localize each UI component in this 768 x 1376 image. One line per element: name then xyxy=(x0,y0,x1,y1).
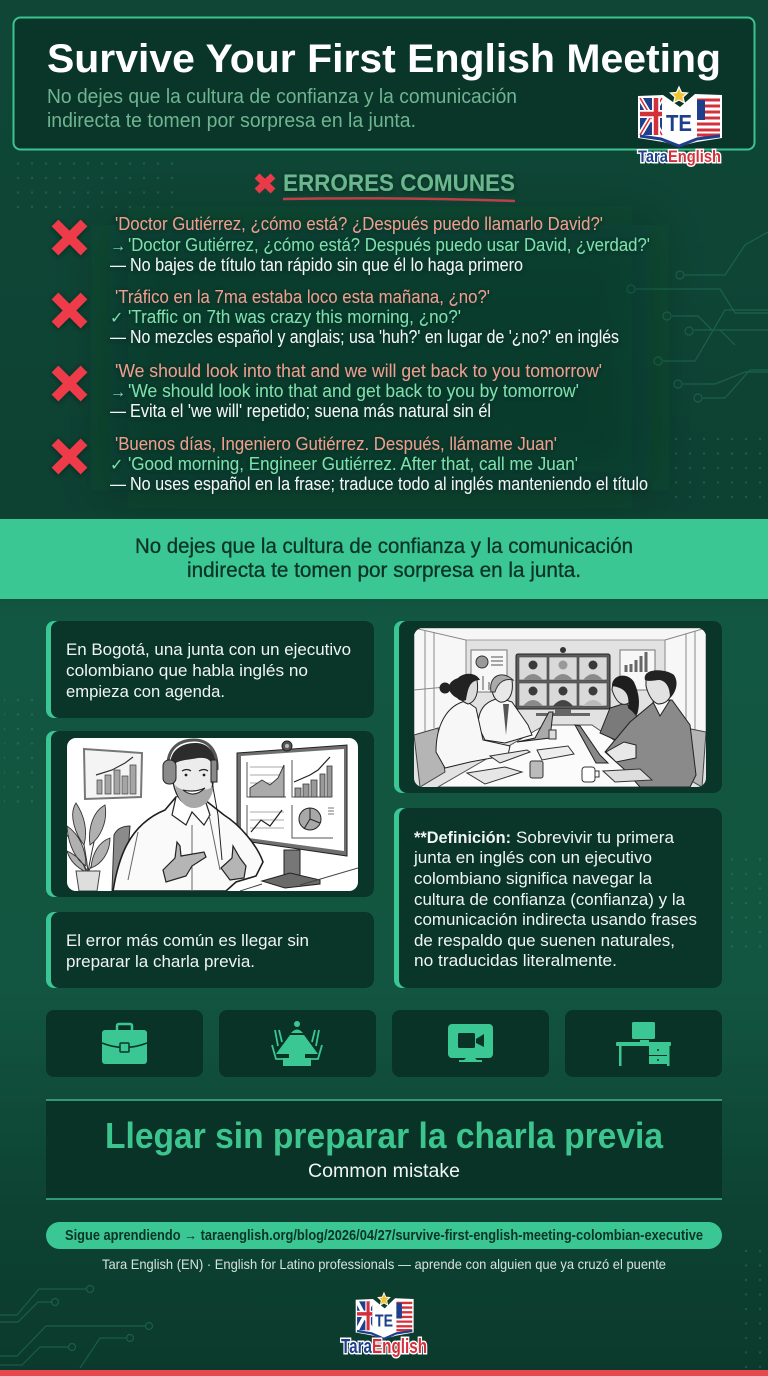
mistake 3: — xyxy=(110,400,126,421)
subtitle xyxy=(47,86,517,132)
link pill xyxy=(46,1222,722,1249)
logo: footer: TaraEnglish xyxy=(341,1336,427,1358)
card: definition: **Definición: xyxy=(414,828,511,847)
logo: footer xyxy=(341,1293,427,1358)
card: definition: cultura de confianza (confianza) y la xyxy=(414,890,686,909)
video screen xyxy=(560,647,566,653)
mistake 2: 'Traffic on 7th was crazy this morning, ¿no?' xyxy=(128,306,461,327)
logo: header: TaraEnglish xyxy=(638,147,721,166)
card: Bogotá intro xyxy=(46,621,374,718)
card: Bogotá intro: empieza con agenda. xyxy=(66,682,225,701)
laptop left xyxy=(517,712,553,742)
mistake 1 xyxy=(55,213,650,275)
icon card: desk xyxy=(565,1010,722,1077)
monitor xyxy=(284,850,300,880)
card: common error xyxy=(46,912,374,988)
mistake 3: 'We should look into that and we will get back to you tomorrow' xyxy=(115,360,602,381)
key message band: Llegar sin preparar la charla previa xyxy=(105,1115,664,1156)
card: definition: Sobrevivir tu primera xyxy=(516,828,675,847)
mistake 4: 'Buenos días, Ingeniero Gutiérrez. Después, llámame Juan' xyxy=(115,433,557,454)
mistake 2: ✓ xyxy=(110,310,123,327)
mistake 3: 'We should look into that and get back to you by tomorrow' xyxy=(128,380,579,401)
title: Survive Your First English Meeting xyxy=(47,37,721,81)
header panel xyxy=(14,18,754,150)
left man xyxy=(478,698,532,743)
green banner xyxy=(0,519,768,599)
card: common error: preparar la charla previa. xyxy=(66,952,255,971)
card: definition: no traducidas literalmente. xyxy=(414,951,617,970)
icon: red cross xyxy=(257,176,273,191)
person shirt xyxy=(113,797,263,891)
card: Bogotá intro: En Bogotá, una junta con un ejecutivo xyxy=(66,640,351,659)
mistake 4 xyxy=(55,433,648,494)
logo: header xyxy=(638,87,722,166)
mistake 4: No uses español en la frase; traduce todo al inglés manteniendo el título xyxy=(130,473,648,494)
green banner: indirecta te tomen por sorpresa en la junta. xyxy=(187,559,581,582)
headphones xyxy=(168,740,217,770)
chair xyxy=(112,826,130,891)
subtitle: indirecta te tomen por sorpresa en la junta. xyxy=(47,110,416,132)
hands xyxy=(163,842,206,882)
mistake 1: — xyxy=(110,254,126,275)
mistake 2 xyxy=(55,286,619,347)
logo: footer: TE xyxy=(375,1311,393,1331)
mistake 3: → xyxy=(110,384,126,401)
mistake 3: Evita el 'we will' repetido; suena más natural sin él xyxy=(130,400,491,421)
plant xyxy=(67,834,110,870)
wall charts xyxy=(471,650,507,692)
icon card: video monitor xyxy=(392,1010,549,1077)
mistake 1: 'Doctor Gutiérrez, ¿cómo está? ¿Después puedo llamarlo David?' xyxy=(115,213,603,234)
card: Bogotá intro: colombiano que habla inglés no xyxy=(66,661,308,680)
link pill: Sigue aprendiendo → taraenglish.org/blog/2026/04/27/survive-first-english-meeting-colombian-executive xyxy=(65,1228,703,1244)
card: illustration of executive on video call xyxy=(46,731,374,897)
bottom red bar xyxy=(0,1370,768,1376)
mistakes list xyxy=(55,213,650,494)
mistake 1: 'Doctor Gutiérrez, ¿cómo está? Después puedo usar David, ¿verdad?' xyxy=(128,234,650,255)
card: definition: colombiano significa navegar la xyxy=(414,869,653,888)
mistake 4: ✓ xyxy=(110,457,123,474)
green banner: No dejes que la cultura de confianza y la comunicación xyxy=(135,535,633,558)
laptop right xyxy=(575,725,608,763)
windows xyxy=(414,628,466,735)
subtitle: No dejes que la cultura de confianza y la comunicación xyxy=(47,86,517,108)
left woman xyxy=(436,701,510,768)
mistake 2: No mezcles español y anglais; usa 'huh?' en lugar de '¿no?' en inglés xyxy=(130,326,619,347)
chairs xyxy=(414,728,445,787)
mistake 1: No bajes de título tan rápido sin que él lo haga primero xyxy=(130,254,523,275)
right man xyxy=(605,700,696,787)
wall frame xyxy=(84,749,142,799)
table papers and cups xyxy=(467,767,522,784)
mistake 2: 'Tráfico en la 7ma estaba loco esta mañana, ¿no?' xyxy=(115,286,490,307)
card: definition: comunicación indirecta usando frases xyxy=(414,910,697,929)
key message band xyxy=(46,1099,722,1199)
card: illustration of meeting room xyxy=(394,621,722,793)
monitor charts xyxy=(247,760,333,838)
mistake 4: 'Good morning, Engineer Gutiérrez. After that, call me Juan' xyxy=(128,453,578,474)
card: definition xyxy=(394,808,722,988)
mistake 2: — xyxy=(110,326,126,347)
logo: header: TE xyxy=(666,110,692,136)
card: definition: junta en inglés con un ejecutivo xyxy=(413,848,652,867)
person head xyxy=(172,758,214,804)
table xyxy=(437,724,640,787)
card: definition: de respaldo que suenen naturales, xyxy=(414,931,675,950)
key message band: Common mistake xyxy=(308,1160,460,1182)
footer text: Tara English (EN) · English for Latino professionals — aprende con alguien que ya cruzó el puente xyxy=(102,1256,666,1272)
mistake 1: → xyxy=(110,238,126,255)
icon card: briefcase xyxy=(46,1010,203,1077)
right woman xyxy=(599,704,637,740)
mistake 4: — xyxy=(110,473,126,494)
icon card: conference table xyxy=(219,1010,376,1077)
card: common error: El error más común es llegar sin xyxy=(66,931,309,950)
mistake 3 xyxy=(55,360,602,421)
section heading: errores comunes: ERRORES COMUNES xyxy=(283,170,515,197)
